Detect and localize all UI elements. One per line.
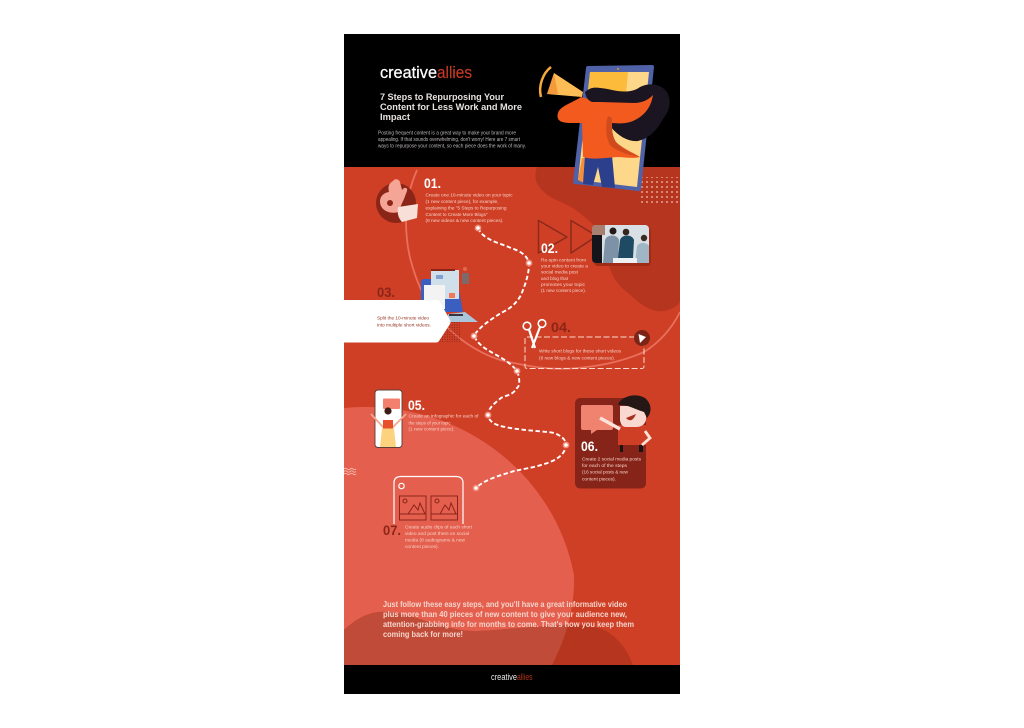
step 4: 04. [551, 319, 571, 335]
step 7: Create audio clips of each short [405, 524, 473, 530]
bottom blob over light circle [344, 612, 568, 665]
megaphone [540, 67, 551, 97]
icon: phone with woman [371, 390, 406, 448]
step 1: explaining the "5 Steps to Repurposing [426, 206, 507, 212]
step 1: 01. [424, 175, 441, 191]
logo [380, 64, 472, 82]
step 2: 02. [541, 240, 558, 256]
icon: scissors [523, 320, 546, 348]
shade on top [606, 116, 640, 157]
footer logo: creative [491, 672, 517, 682]
closing text: attention-grabbing info for months to come. That's how you keep them [383, 619, 634, 629]
arc line [406, 170, 680, 369]
footer panel [344, 665, 680, 694]
dots grid [641, 177, 678, 203]
step 2: (1 new content piece). [541, 288, 586, 294]
intro text: appealing. If that sounds overwhelming, don't worry! Here are 7 smart [378, 137, 521, 143]
step 7: 07. [383, 522, 401, 538]
icon: character [600, 395, 651, 452]
step 2: social media post [541, 270, 579, 276]
white pentagon callout [344, 300, 450, 342]
logo: allies [437, 64, 472, 82]
illustration: woman with megaphone in phone [540, 65, 670, 191]
icon: gallery frame [394, 476, 463, 524]
step 2: and blog that [541, 276, 569, 282]
step 2: Re-spin content from [541, 258, 586, 264]
step 4: Write short blogs for these short videos [539, 348, 622, 354]
step 4: (8 new blogs & new content pieces). [539, 356, 615, 362]
head hair [586, 88, 608, 102]
icon: laptop [421, 267, 478, 322]
step 6 [575, 395, 651, 488]
step 5: the steps of your topic [408, 420, 451, 426]
step 1: (1 new content piece), for example, [426, 199, 498, 205]
icon: play triangles [538, 220, 597, 253]
title: Impact [380, 111, 410, 122]
step 6: Create 2 social media posts [582, 456, 642, 462]
closing text: Just follow these easy steps, and you'll have a great informative video [383, 599, 627, 609]
step 1: (8 new videos & new content pieces). [426, 218, 504, 224]
header panel [344, 34, 680, 167]
step 3: into multiple short videos. [377, 322, 431, 328]
pants [583, 155, 615, 188]
closing text: plus more than 40 pieces of new content to give your audience new, [383, 609, 627, 619]
waves [344, 468, 356, 475]
title: 7 Steps to Repurposing Your [380, 91, 504, 102]
logo: creative [380, 64, 437, 82]
dashed box [525, 337, 644, 368]
title: Content for Less Work and More [380, 101, 522, 112]
icon: ok hand [376, 179, 418, 223]
step 1: Content to Create More Blogs" [426, 212, 488, 218]
intro text [378, 130, 526, 150]
step 1: Create one 10-minute video on your topic [426, 192, 513, 198]
icon: speech bubble [581, 405, 613, 434]
step 5: Create an infographic for each of [408, 414, 479, 420]
step 7: media (8 audiograms & new [405, 538, 465, 544]
step 3: Split the 10-minute video [377, 316, 429, 322]
step 7 [383, 476, 473, 550]
step 1 [376, 175, 513, 224]
step 6: 06. [581, 438, 598, 454]
step 2 [538, 220, 651, 294]
dark blob top right [535, 167, 680, 311]
step 6: (16 social posts & new [582, 470, 628, 476]
step 5 [371, 390, 479, 448]
step 7: content pieces). [405, 544, 439, 550]
closing text: coming back for more! [383, 629, 463, 639]
dashed path [471, 225, 569, 491]
step 3 [344, 267, 478, 342]
step 2: your video to create a [541, 264, 588, 270]
step 4 [523, 319, 650, 368]
photo: team meeting [592, 225, 651, 266]
intro text: ways to repurpose your content, so each piece does the work of many. [378, 144, 526, 150]
intro text: Posting frequent content is a great way to make your brand more [378, 130, 516, 136]
red main panel [344, 167, 680, 665]
dark card [575, 398, 646, 488]
step 5: (1 new content piece). [408, 426, 454, 432]
footer logo: allies [517, 672, 533, 682]
large light circle [344, 407, 574, 631]
icon: play button [634, 330, 650, 346]
step 5: 05. [408, 397, 425, 413]
step 6: content pieces). [582, 476, 616, 482]
bottom dark blob [344, 612, 633, 665]
title [380, 91, 522, 122]
step 3: 03. [377, 284, 395, 300]
closing text [383, 599, 634, 639]
orange top [558, 95, 653, 159]
dotted shadow [438, 322, 460, 342]
step 7: video and post them on social [405, 531, 469, 537]
step 6: for each of the steps [582, 463, 628, 469]
hair [585, 84, 670, 141]
step 2: promotes your topic [541, 282, 586, 288]
phone body [573, 65, 654, 191]
